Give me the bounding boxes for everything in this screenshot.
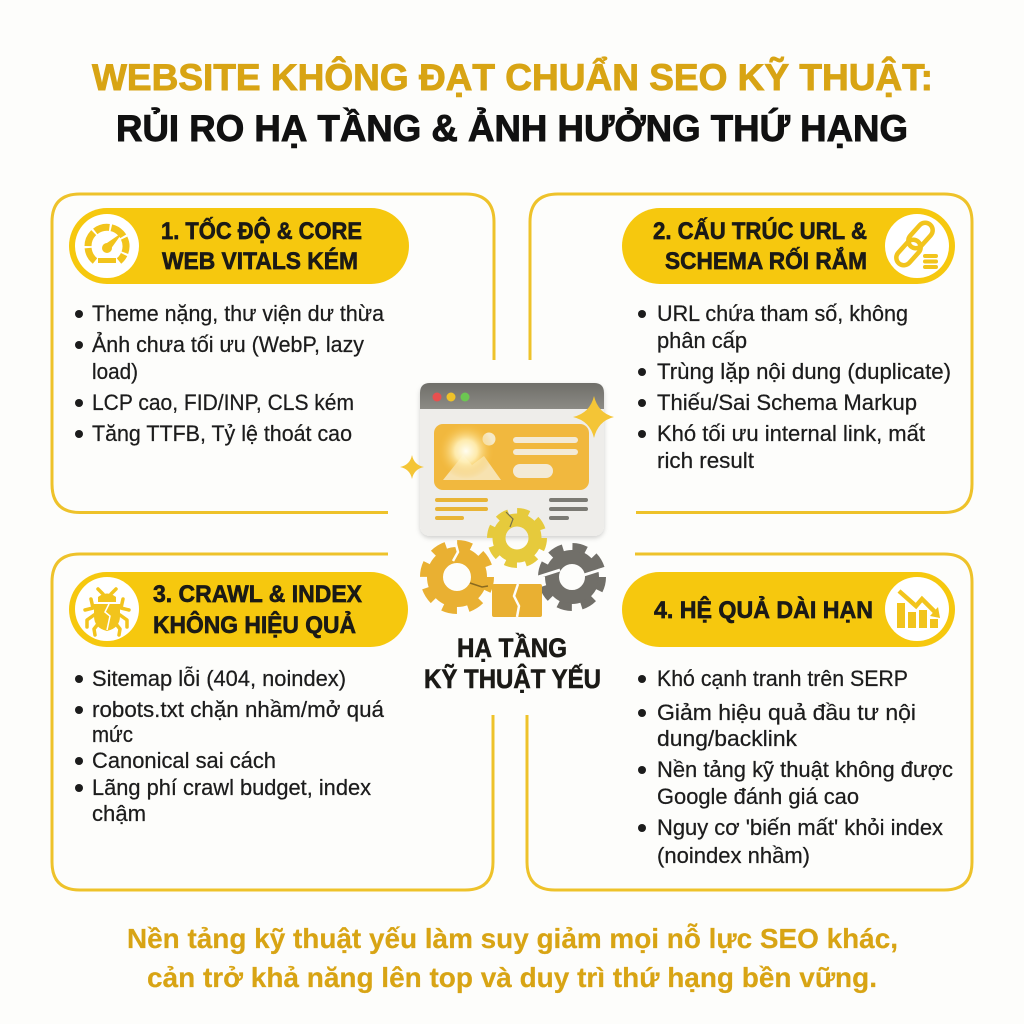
bullet list 2: rich result: [657, 448, 755, 473]
bullet list 3: chậm: [92, 801, 146, 826]
heading pill 4: 4. HỆ QUẢ DÀI HẠN: [654, 595, 873, 624]
bullet list 4: Google đánh giá cao: [657, 784, 859, 809]
bullet list 1: Ảnh chưa tối ưu (WebP, lazy: [92, 332, 365, 357]
gold gear: [424, 541, 490, 610]
title: WEBSITE KHÔNG ĐẠT CHUẨN SEO KỸ THUẬT:: [92, 56, 933, 98]
bullet list 4: Khó cạnh tranh trên SERP: [657, 666, 908, 691]
bullet list 2: Khó tối ưu internal link, mất: [657, 421, 926, 446]
icon: speed gauge: [75, 214, 139, 278]
panel: crawl and index: [52, 554, 493, 890]
panel: url structure and schema: [530, 194, 972, 512]
bullet list 4: Giảm hiệu quả đầu tư nội: [657, 700, 916, 725]
bullet list 2: URL chứa tham số, không: [657, 301, 908, 326]
bullet list 1: Tăng TTFB, Tỷ lệ thoát cao: [92, 421, 352, 446]
bullet list 3: mức: [92, 722, 133, 747]
bullet list 2: [638, 301, 951, 473]
heading pill 1: WEB VITALS KÉM: [162, 247, 358, 275]
heading pill 1: 1. TỐC ĐỘ & CORE: [161, 217, 362, 245]
bullet list 3: Sitemap lỗi (404, noindex): [92, 666, 346, 691]
yellow gear: [490, 512, 544, 564]
icon: sparkles: [400, 396, 614, 479]
icon: bug: [75, 577, 139, 641]
bullet list 1: Theme nặng, thư viện dư thừa: [92, 301, 384, 326]
bullet list 2: Trùng lặp nội dung (duplicate): [657, 359, 951, 384]
bullet list 2: phân cấp: [657, 328, 747, 353]
title: RỦI RO HẠ TẦNG & ẢNH HƯỞNG THỨ HẠNG: [116, 107, 908, 149]
heading pill 3: [69, 572, 408, 647]
heading pill 1: [69, 208, 409, 284]
bullet list 4: Nền tảng kỹ thuật không được: [657, 757, 953, 782]
bullet list 1: [75, 301, 384, 446]
panel: speed and core web vitals: [52, 194, 494, 512]
icon: broken link and database: [885, 214, 949, 278]
icon: declining chart: [885, 577, 949, 641]
bullet list 1: LCP cao, FID/INP, CLS kém: [92, 390, 354, 415]
center label: KỸ THUẬT YẾU: [424, 664, 601, 694]
bullet list 3: [75, 666, 384, 826]
heading pill 3: 3. CRAWL & INDEX: [153, 581, 362, 608]
bullet list 1: load): [92, 359, 138, 384]
bullet list 4: [638, 666, 953, 868]
bullet list 4: (noindex nhầm): [657, 843, 810, 868]
heading pill 4: [622, 572, 955, 647]
footer conclusion: cản trở khả năng lên top và duy trì thứ hạng bền vững.: [147, 962, 877, 993]
heading pill 3: KHÔNG HIỆU QUẢ: [153, 610, 356, 639]
central illustration: browser window and broken gears: [400, 383, 614, 694]
center label: HẠ TẦNG: [457, 633, 567, 663]
bullet list 3: Lãng phí crawl budget, index: [92, 775, 372, 800]
bullet list 3: robots.txt chặn nhầm/mở quá: [92, 697, 384, 722]
footer conclusion: [127, 923, 898, 993]
browser window: [420, 383, 604, 536]
title: [92, 56, 933, 149]
broken box: [492, 584, 542, 617]
heading pill 2: SCHEMA RỐI RẮM: [665, 247, 867, 275]
panel: long term consequences: [527, 554, 972, 890]
heading pill 2: 2. CẤU TRÚC URL &: [653, 217, 867, 245]
footer conclusion: Nền tảng kỹ thuật yếu làm suy giảm mọi nỗ lực SEO khác,: [127, 923, 898, 954]
bullet list 4: Nguy cơ 'biến mất' khỏi index: [657, 815, 944, 840]
grey gear: [538, 547, 606, 607]
heading pill 2: [622, 208, 955, 284]
bullet list 4: dung/backlink: [657, 726, 798, 751]
bullet list 3: Canonical sai cách: [92, 748, 276, 773]
center label: [424, 633, 601, 694]
bullet list 2: Thiếu/Sai Schema Markup: [657, 390, 917, 415]
